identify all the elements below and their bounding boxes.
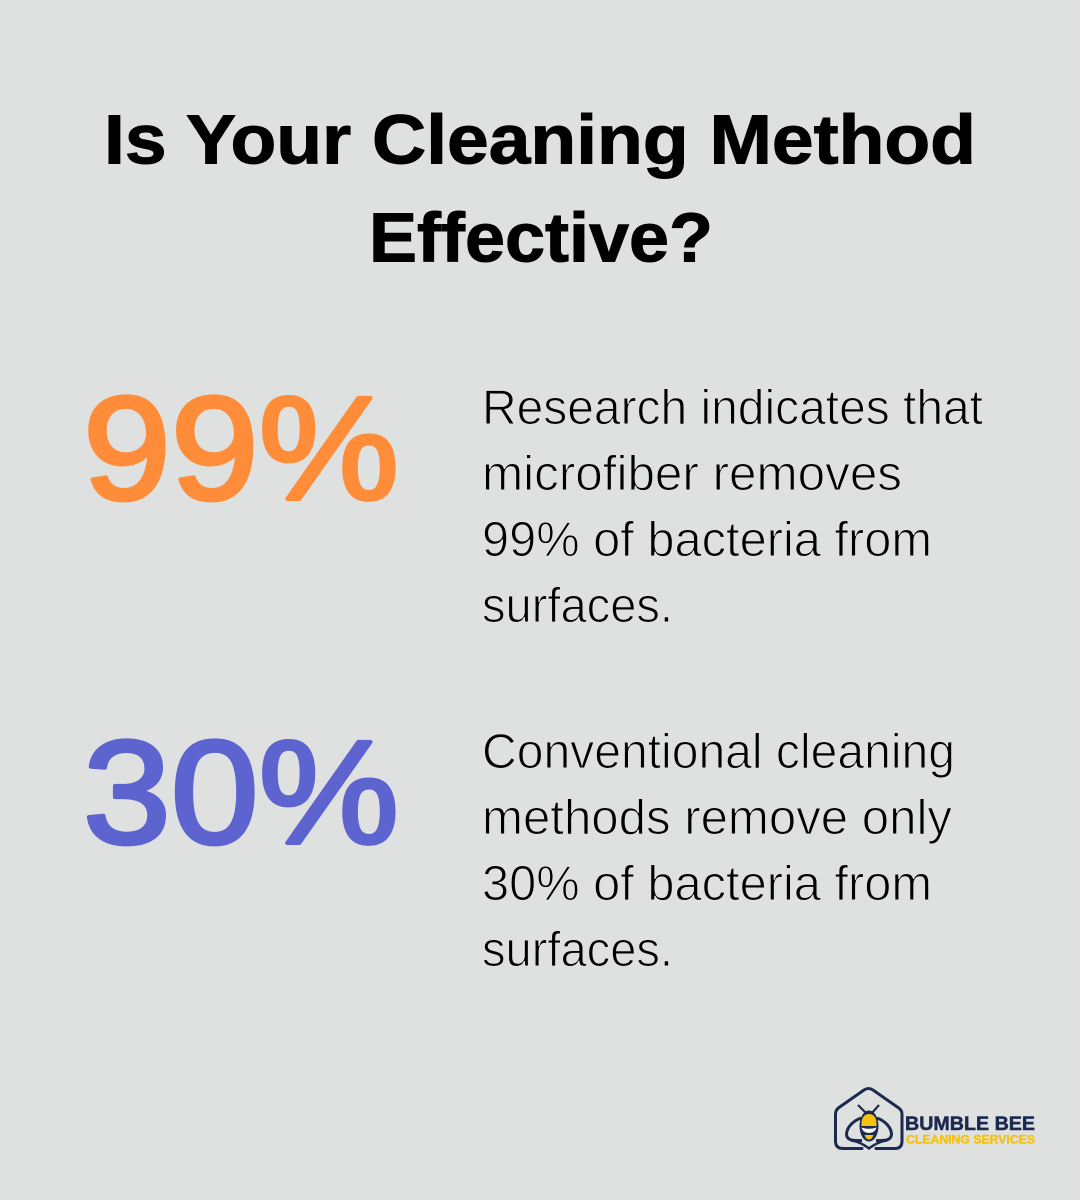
text block: microfiber: surfaces. — [482, 579, 673, 633]
logo text: BUMBLE BEE — [905, 1113, 1035, 1135]
text block: conventional: methods remove only — [482, 791, 952, 845]
text block: microfiber: microfiber removes — [482, 447, 902, 501]
text block: microfiber: 99% of bacteria from — [482, 513, 932, 567]
title — [104, 100, 976, 276]
text block: microfiber: Research indicates that — [482, 381, 983, 435]
text block: microfiber — [482, 381, 983, 633]
logo tagline: CLEANING SERVICES — [906, 1132, 1035, 1146]
title: Is Your Cleaning Method — [104, 100, 976, 178]
text block: conventional: Conventional cleaning — [482, 725, 955, 779]
stat: 30%: 30% — [83, 711, 399, 875]
text block: conventional: surfaces. — [482, 923, 673, 977]
title: Effective? — [369, 198, 713, 276]
text block: conventional: 30% of bacteria from — [482, 857, 932, 911]
stat: 99%: 99% — [83, 367, 399, 531]
icon: bee house — [836, 1088, 902, 1149]
text block: conventional — [482, 725, 955, 977]
logo — [836, 1088, 1035, 1149]
